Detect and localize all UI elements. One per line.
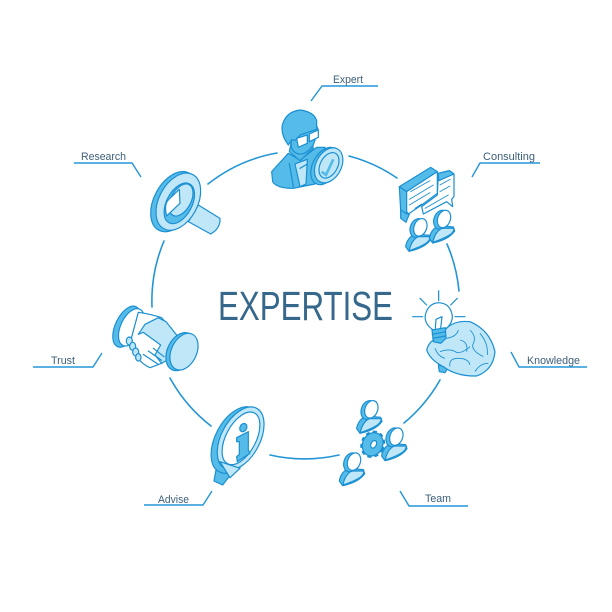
label: Consulting: Consulting bbox=[483, 151, 535, 163]
label: Trust: Trust bbox=[51, 355, 75, 367]
label: Trust bbox=[33, 353, 102, 367]
icon: speech bubbles and two people bbox=[399, 167, 455, 251]
icon: light bulb and brain bbox=[413, 291, 495, 376]
label: Research: Research bbox=[81, 151, 126, 163]
label: Advise bbox=[144, 491, 212, 506]
label: Consulting bbox=[472, 151, 540, 177]
icon: expert with check badge bbox=[272, 110, 349, 190]
label: Knowledge bbox=[511, 352, 587, 367]
icon: team with gear bbox=[339, 399, 407, 486]
ring: connecting arcs bbox=[152, 153, 459, 459]
label: Expert: Expert bbox=[333, 74, 363, 86]
icon: handshake bbox=[107, 302, 204, 375]
icon: magnifying glass bbox=[141, 164, 220, 240]
label: Advise: Advise bbox=[158, 494, 189, 506]
title: EXPERTISE bbox=[218, 283, 393, 329]
label: Knowledge: Knowledge bbox=[527, 355, 580, 367]
label: Expert bbox=[311, 74, 378, 101]
icon: info speech bubble bbox=[201, 399, 274, 485]
label: Research bbox=[74, 151, 141, 177]
label: Team: Team bbox=[425, 493, 451, 505]
label: Team bbox=[400, 491, 468, 506]
